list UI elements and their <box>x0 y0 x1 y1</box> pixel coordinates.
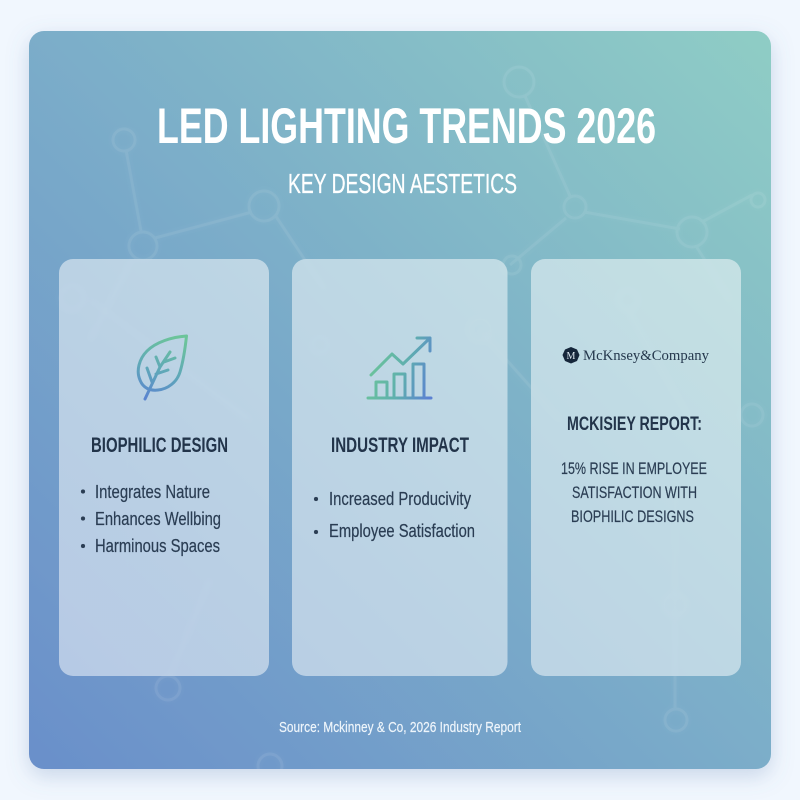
bullet list: impact: Increased Producivity <box>329 489 471 509</box>
panel: industry impact <box>292 259 508 676</box>
bullet list: biophilic: Enhances Wellbing <box>95 509 221 529</box>
report text: SATISFACTION WITH <box>572 483 697 502</box>
bullet list: biophilic <box>81 482 221 556</box>
icon: leaf <box>138 336 186 399</box>
subtitle: KEY DESIGN AESTETICS <box>288 168 517 199</box>
report text <box>561 459 707 526</box>
report text: BIOPHILIC DESIGNS <box>571 507 694 526</box>
report text: 15% RISE IN EMPLOYEE <box>561 459 707 478</box>
source note: Source: Mckinney & Co, 2026 Industry Report <box>279 719 522 736</box>
bullet list: biophilic: Integrates Nature <box>95 482 210 502</box>
background network pattern <box>60 67 765 778</box>
bullet list: biophilic: Harminous Spaces <box>95 536 220 556</box>
logo: mckinsey: McKnsey&Company <box>583 348 709 364</box>
bullet list: impact: Employee Satisfaction <box>329 521 475 541</box>
panel: mckinsey report <box>531 259 741 676</box>
logo: mckinsey: M <box>567 351 576 362</box>
heading: industry impact: INDUSTRY IMPACT <box>331 434 469 457</box>
bullet list: impact <box>314 489 475 541</box>
panel: biophilic design <box>59 259 269 676</box>
heading: biophilic design: BIOPHILIC DESIGN <box>91 434 228 457</box>
icon: growth chart <box>368 338 431 398</box>
heading: report: MCKISIEY REPORT: <box>567 414 702 435</box>
